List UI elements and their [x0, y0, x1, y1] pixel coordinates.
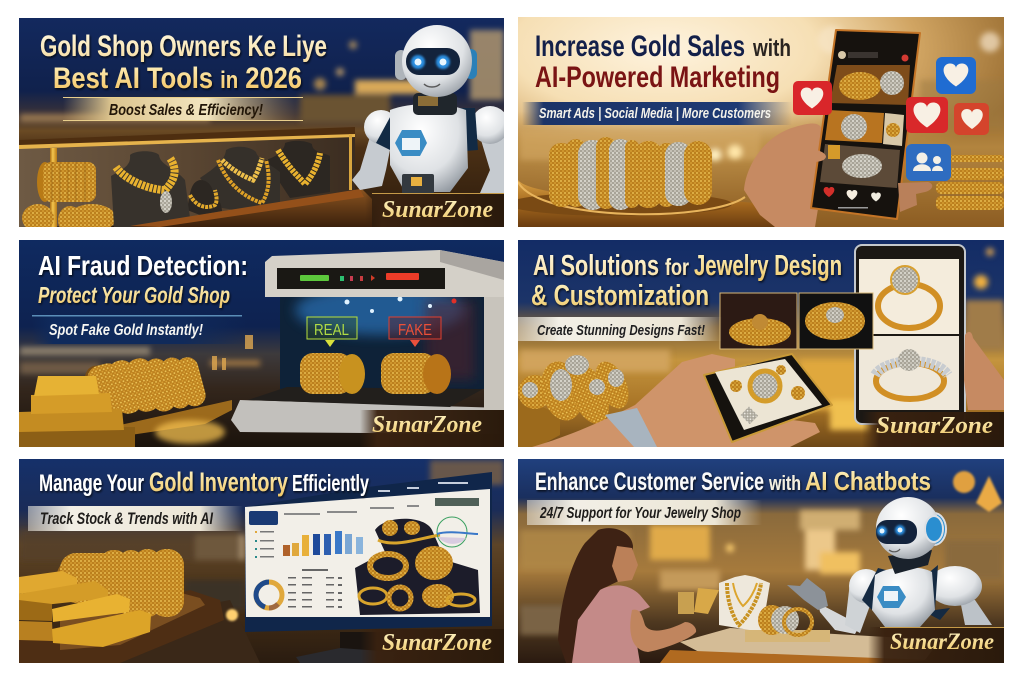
- robot smile: [424, 84, 440, 87]
- showcase base: [130, 189, 372, 227]
- ring design 2: [875, 349, 948, 399]
- robot right arm: [480, 138, 504, 193]
- city grid: [212, 335, 253, 370]
- lower glow: [518, 17, 1004, 227]
- donut chart: [256, 582, 282, 608]
- robot visor: [876, 520, 917, 544]
- logo line: [880, 627, 1004, 628]
- right gold stacks: [935, 155, 1004, 210]
- real label: REAL: [314, 322, 349, 339]
- scanner top and side: [265, 250, 504, 412]
- title part 1: Enhance Customer Service: [535, 468, 764, 496]
- robot ear front: [925, 516, 943, 542]
- panel: AI chatbots customer service: [518, 459, 1004, 663]
- title part 1: Increase Gold Sales: [535, 30, 745, 63]
- bust with necklace 1: [111, 151, 190, 227]
- title line 1: AI Fraud Detection:: [38, 250, 248, 281]
- fake bangles: [381, 353, 451, 394]
- woman customer: [558, 528, 696, 663]
- robot chest badge: [877, 586, 906, 608]
- title line 2: Best AI Tools in 2026: [53, 62, 302, 95]
- phone header text: [838, 51, 908, 62]
- ribbon text: Smart Ads | Social Media | More Customers: [539, 105, 771, 122]
- robot neck: [413, 93, 457, 115]
- robot torso: [390, 104, 468, 192]
- arm: [630, 610, 696, 652]
- panel: jewelry design and customization: [518, 240, 1004, 447]
- chamber red glow: [425, 300, 475, 380]
- bust with necklace 2: [200, 147, 280, 212]
- title for: for: [665, 254, 689, 280]
- robot shoulders: [364, 106, 509, 144]
- chart legend: [255, 531, 274, 558]
- title line 1: AI Solutions: [533, 250, 659, 282]
- heart tile 3: [906, 97, 948, 133]
- bokeh: [520, 26, 1004, 161]
- monitor body: [245, 472, 492, 632]
- panel: AI-powered marketing: [508, 17, 1004, 227]
- table: [19, 600, 260, 663]
- watch: [605, 408, 657, 447]
- gold bars: [19, 571, 151, 647]
- gold bangles stack: [37, 162, 96, 202]
- logo: SunarZone: [890, 629, 994, 654]
- showcase glass top: [19, 127, 355, 144]
- face: [612, 546, 638, 582]
- subtitle ribbon: [527, 500, 762, 525]
- bangles on tray: [745, 605, 830, 642]
- logo: SunarZone: [382, 197, 493, 223]
- monitor stand: [340, 632, 392, 655]
- logo line: [372, 193, 504, 194]
- gold bars: [19, 376, 135, 447]
- robot smile: [889, 549, 900, 552]
- fingers right: [898, 182, 932, 212]
- title with: with: [768, 473, 801, 495]
- robot chest badge: [395, 130, 427, 156]
- gold bowl: [508, 180, 787, 227]
- subtitle ribbon: [28, 506, 243, 531]
- bust with necklace 3: [265, 141, 330, 198]
- blurred shop: [20, 460, 504, 610]
- logo bar: [365, 193, 504, 227]
- jewelry catalog: [355, 519, 480, 615]
- showcase back: [19, 134, 355, 227]
- jewelry bust: [719, 575, 770, 632]
- robot ear right: [468, 49, 477, 79]
- tortoise trim: [130, 189, 364, 227]
- logo bar: [360, 629, 504, 663]
- robot indicator: [411, 177, 422, 186]
- lamp glare: [226, 609, 238, 621]
- title line 1: Gold Shop Owners Ke Liye: [40, 30, 327, 63]
- scanner display: [277, 268, 445, 289]
- diamond rings pile: [518, 355, 635, 429]
- subtitle: 24/7 Support for Your Jewelry Shop: [539, 505, 741, 522]
- logo bar: [868, 627, 1004, 663]
- screen header chip: [435, 498, 479, 506]
- phone action icons: [824, 187, 881, 208]
- subtitle: Create Stunning Designs Fast!: [537, 322, 705, 339]
- small jewelry stands: [678, 588, 719, 614]
- robot far arm: [960, 600, 992, 625]
- blurred city lights: [20, 347, 260, 374]
- heart tile 2: [936, 57, 976, 94]
- scanner chamber: [280, 297, 484, 389]
- platform: [248, 387, 483, 407]
- real tag: [307, 317, 357, 347]
- robot belly: [402, 174, 434, 194]
- title part 1: Manage Your: [39, 470, 144, 497]
- counter: [680, 628, 940, 663]
- showcase post right: [349, 134, 352, 190]
- robot near forearm: [818, 603, 860, 634]
- panel: best AI tools for gold shop owners: [19, 18, 509, 234]
- robot neck: [888, 550, 932, 574]
- thumb: [804, 149, 826, 162]
- panel: AI fraud detection: [19, 240, 504, 447]
- showcase post left: [50, 148, 57, 227]
- robot head: [876, 497, 940, 559]
- bangles in bowl: [549, 137, 712, 210]
- bar chart: [283, 531, 363, 556]
- feed image 1: [830, 65, 910, 105]
- chandeliers: [953, 471, 1002, 512]
- subtitle: Boost Sales & Efficiency!: [109, 102, 264, 119]
- holding hand: [744, 124, 826, 227]
- title part 3: Efficiently: [292, 470, 369, 496]
- robot assistant: [352, 25, 509, 195]
- green bar: [300, 275, 329, 281]
- right hand: [964, 332, 1004, 410]
- title gold part: AI Chatbots: [805, 466, 931, 496]
- red bar: [386, 273, 419, 280]
- logo bar: [360, 410, 504, 447]
- subtitle band: [32, 315, 247, 344]
- counter edge: [660, 650, 930, 663]
- small tablet: [704, 354, 832, 442]
- hair: [558, 528, 633, 663]
- monitor screen: [245, 489, 490, 617]
- robot ear left: [395, 50, 407, 80]
- subtitle ribbon: [63, 97, 303, 121]
- robot torso: [872, 567, 935, 627]
- ring design 1: [878, 266, 940, 328]
- robot head: [402, 25, 472, 97]
- image card 2: [799, 293, 873, 349]
- heart tile 4: [954, 103, 989, 135]
- phone body: [811, 30, 920, 219]
- top nav text: [378, 482, 468, 492]
- subtitle: Spot Fake Gold Instantly!: [49, 322, 204, 339]
- jewelry box: [518, 398, 560, 447]
- chamber glow: [295, 285, 465, 335]
- real bangles: [300, 353, 365, 394]
- gold tray: [120, 400, 232, 436]
- alarm light: [452, 298, 456, 304]
- title line 2: & Customization: [531, 280, 709, 312]
- logo: SunarZone: [382, 630, 492, 656]
- robot joints: [862, 565, 950, 620]
- title part 2: AI-Powered Marketing: [535, 61, 780, 94]
- keyboard: [296, 648, 395, 663]
- panel background: [518, 240, 1004, 447]
- feed image 4: [820, 144, 900, 188]
- robot eyes: [411, 55, 450, 69]
- bangles pile: [77, 355, 208, 419]
- panel background: [518, 459, 1004, 663]
- panel background: [518, 17, 1004, 227]
- robot hand: [787, 578, 828, 610]
- feed image 3: [883, 113, 904, 146]
- panel background: [19, 18, 504, 227]
- panel background: [19, 459, 504, 663]
- robot left arm: [352, 139, 390, 190]
- logo: SunarZone: [372, 412, 482, 438]
- logo: SunarZone: [876, 413, 993, 439]
- arm and hand: [532, 354, 820, 447]
- fake tag: [389, 317, 441, 347]
- robot upper arm: [845, 582, 872, 633]
- robot eyes: [877, 525, 905, 536]
- big tablet: [855, 245, 965, 424]
- robot ear: [922, 513, 946, 545]
- blue ribbon: [522, 102, 792, 125]
- fake label: FAKE: [398, 322, 432, 339]
- status icons: [340, 275, 375, 281]
- subtitle: Track Stock & Trends with AI: [40, 509, 214, 528]
- screen nav button: [249, 511, 278, 525]
- title line 2: Protect Your Gold Shop: [38, 282, 230, 308]
- bangles pile: [56, 549, 184, 617]
- title jewelry: Jewelry Design: [694, 250, 842, 282]
- chamber lights: [344, 296, 432, 313]
- subtitle ribbon: [518, 317, 722, 341]
- robot neck gold: [418, 96, 438, 106]
- blurred shop lights: [20, 30, 504, 123]
- logo bar: [862, 412, 1004, 447]
- heart tile 1: [793, 81, 832, 115]
- showcase gold trim: [19, 134, 355, 149]
- title gold part: Gold Inventory: [149, 467, 288, 497]
- followers tile: [906, 144, 951, 181]
- robot visor: [406, 48, 460, 75]
- robot shoulders: [849, 566, 982, 606]
- wooden tray: [19, 590, 224, 663]
- showroom bokeh: [520, 510, 1004, 635]
- scanner base: [231, 400, 504, 434]
- lower bangles: [22, 204, 114, 227]
- floor glow: [155, 420, 225, 444]
- ring gauge: [437, 517, 478, 547]
- robot assistant: [787, 497, 992, 634]
- bokeh shelves: [520, 248, 1004, 430]
- title with: with: [752, 35, 791, 62]
- tray inner: [60, 590, 205, 650]
- data table: [288, 569, 342, 608]
- robot joints: [376, 108, 478, 152]
- panel: gold inventory management: [19, 459, 504, 663]
- feed image 2: [825, 110, 884, 143]
- divider: [32, 315, 242, 316]
- screen header text: [284, 505, 419, 515]
- panel background: [19, 240, 504, 447]
- image card 1: [720, 293, 797, 349]
- blouse: [572, 585, 650, 663]
- small bust with necklace: [187, 180, 222, 215]
